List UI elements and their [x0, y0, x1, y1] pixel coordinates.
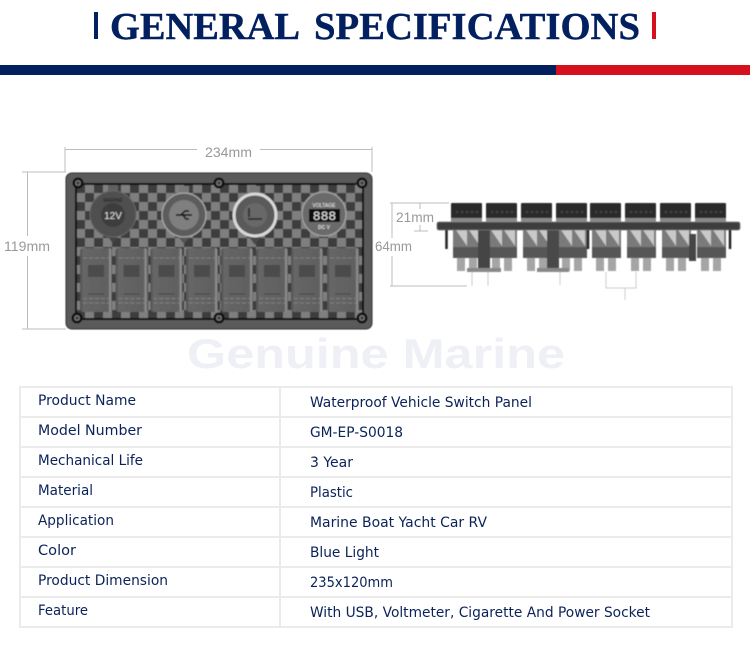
- top rocker caps: [451, 203, 726, 222]
- rear switch bodies and terminals: [453, 230, 726, 271]
- row: mechanical life: [38, 453, 353, 471]
- row: color: Blue Light: [310, 545, 379, 561]
- row: application: [38, 513, 487, 531]
- title: GENERAL: [110, 6, 300, 48]
- voltmeter: [302, 192, 346, 236]
- socket: 12V cigarette: MARINE: [103, 198, 123, 204]
- dimension: side depth 64mm and 21mm: [375, 203, 467, 286]
- row: product dimension: Product Dimension: [38, 573, 168, 589]
- row: mechanical life: 3 Year: [310, 455, 353, 471]
- dimension: panel width 234mm: [65, 145, 372, 172]
- rocker switches row: [80, 248, 359, 312]
- wires: [472, 272, 636, 300]
- row: mechanical life: Mechanical Life: [38, 453, 143, 469]
- row: color: Color: [38, 543, 76, 559]
- row: product dimension: 235x120mm: [310, 575, 393, 591]
- mounting screws side: [446, 230, 730, 249]
- voltmeter: DC V: [318, 225, 331, 231]
- row: product name: [38, 393, 532, 411]
- row: material: [38, 483, 353, 501]
- row: application: Marine Boat Yacht Car RV: [310, 515, 487, 531]
- socket: 12V cigarette: 12V: [104, 211, 122, 222]
- row: product name: Waterproof Vehicle Switch Panel: [310, 395, 532, 411]
- dimension: panel height 119mm: 119mm: [4, 239, 50, 254]
- dimension: side depth 64mm and 21mm: 21mm: [396, 210, 434, 225]
- mounting plate: [437, 222, 740, 230]
- row: product dimension: [38, 573, 393, 591]
- row: feature: [38, 603, 650, 621]
- panel frame: [66, 173, 372, 329]
- table grid: [20, 386, 732, 628]
- checker carbon face: [76, 184, 363, 319]
- row: color: [38, 543, 379, 561]
- row: material: Plastic: [310, 485, 353, 501]
- title accent bar: right red: [652, 12, 656, 39]
- row: model number: [38, 423, 403, 441]
- switch panel side view: [437, 203, 740, 300]
- watermark: Genuine Marine: [187, 330, 565, 377]
- title: [110, 6, 640, 48]
- dimension: panel height 119mm: [4, 172, 66, 329]
- title: SPECIFICATIONS: [314, 6, 640, 48]
- specifications table: [20, 386, 732, 628]
- row: feature: Feature: [38, 603, 88, 619]
- row: product name: Product Name: [38, 393, 136, 409]
- voltmeter: 888: [313, 209, 336, 224]
- title accent bar: left navy: [94, 12, 98, 39]
- socket threads: [467, 230, 696, 272]
- dimension: side depth 64mm and 21mm: 64mm: [375, 239, 412, 254]
- switch panel front view: [66, 173, 372, 329]
- header band: red section: [556, 65, 750, 75]
- socket: power with light ring: [234, 186, 276, 245]
- row: application: Application: [38, 513, 114, 529]
- header band: navy section: [0, 65, 556, 75]
- mounting screws: [72, 178, 368, 324]
- socket: USB: [162, 186, 206, 244]
- voltmeter: VOLTAGE: [313, 203, 336, 209]
- row: model number: Model Number: [38, 423, 142, 439]
- dimension: panel width 234mm: 234mm: [205, 145, 252, 160]
- row: feature: With USB, Voltmeter, Cigarette And Power Socket: [310, 605, 650, 621]
- socket: 12V cigarette: [90, 185, 136, 244]
- row: material: Material: [38, 483, 93, 499]
- row: model number: GM-EP-S0018: [310, 425, 403, 441]
